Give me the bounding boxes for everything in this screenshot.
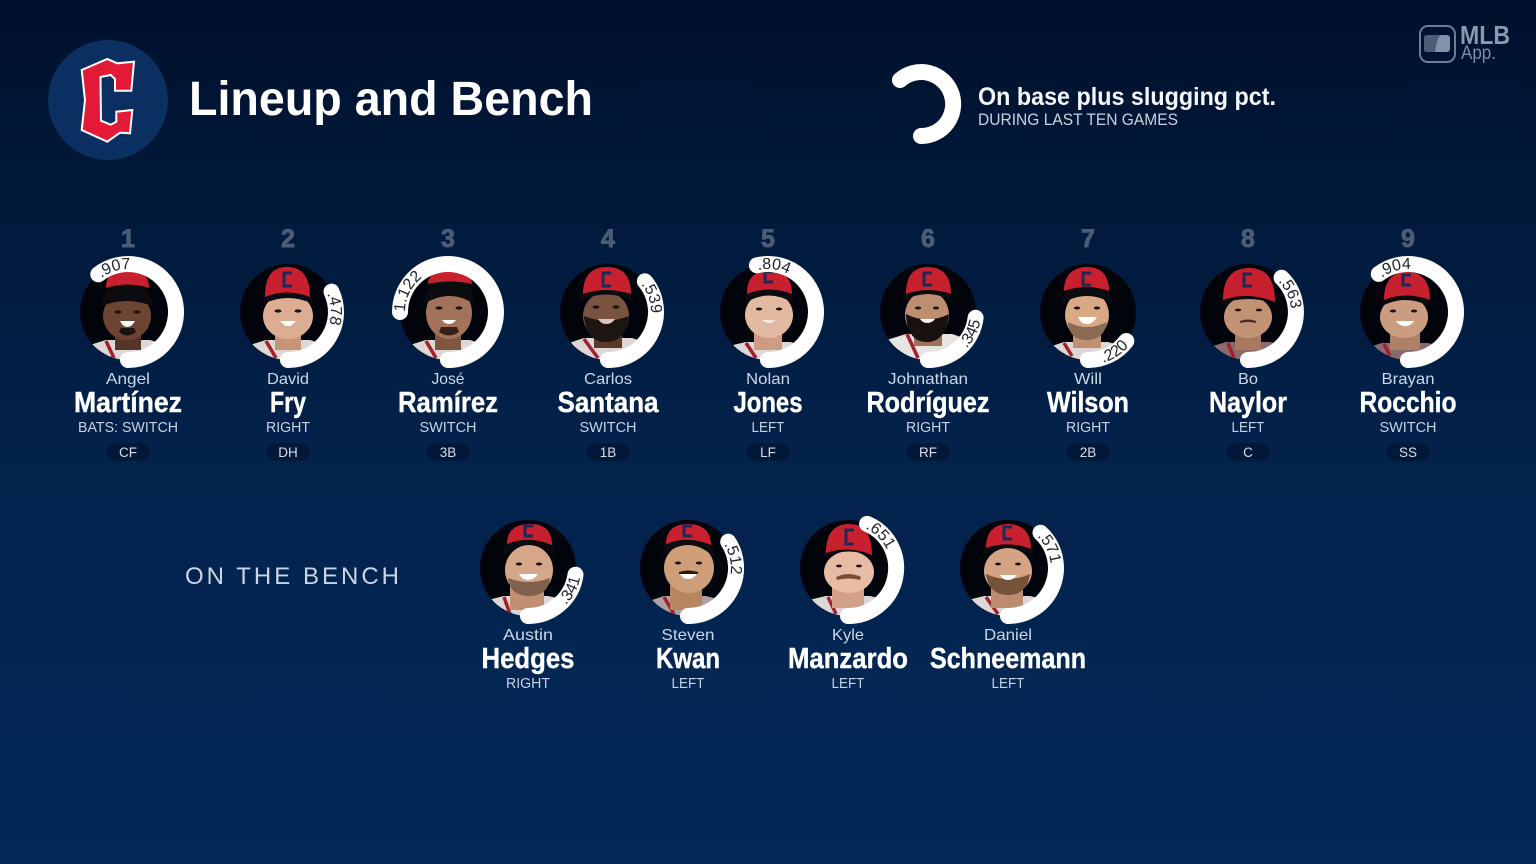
batting order number: 2 [281,225,295,253]
position [1067,443,1109,461]
headshot [800,520,896,616]
position: LF [760,445,776,460]
OPS ring .904 [1370,256,1464,368]
batting order number: 9 [1401,225,1415,253]
position [427,443,469,461]
bats: LEFT [992,675,1024,692]
team logo [48,40,168,160]
OPS ring .651 [840,516,904,624]
name [930,627,1086,675]
MLB App logo: MLB [1460,20,1510,50]
bats: BATS: SWITCH [78,419,178,436]
name: Jones [734,387,802,419]
player: Steven Kwan [640,520,744,692]
name: Kyle [832,627,864,644]
batting order number: 1 [121,225,135,253]
batting order number: 4 [601,225,615,253]
name: Austin [503,627,553,644]
OPS ring .571 [1000,524,1064,624]
name [398,371,498,419]
bats: RIGHT [1066,419,1110,436]
headshot [640,520,736,616]
name: Angel [106,371,150,388]
headshot [1360,272,1448,360]
MLB App logo [1420,20,1510,64]
position [1387,443,1429,461]
batting order number: 6 [921,225,935,253]
name: Santana [558,387,659,419]
title: Lineup and Bench [189,73,593,126]
OPS ring .904: .904 [1382,258,1410,277]
name: Martínez [74,387,182,419]
position: 1B [600,445,616,460]
headshot [480,520,576,616]
OPS ring .345: .345 [962,320,980,348]
OPS ring .651: .651 [866,523,895,549]
player: Brayan Rocchio [1360,225,1464,461]
OPS ring .345 [920,310,984,368]
name: Schneemann [930,643,1086,675]
OPS ring 1.122 [392,256,504,368]
name: Naylor [1209,387,1287,419]
headshot [80,272,168,360]
player: Bo Naylor [1200,225,1304,461]
name: Manzardo [788,643,908,675]
position [107,443,149,461]
bats: LEFT [1232,419,1264,436]
name: Bo [1238,371,1258,388]
OPS ring .907 [90,256,184,368]
position: 2B [1080,445,1096,460]
headshot [400,272,488,360]
OPS ring .478: .478 [328,294,342,325]
headshot [720,268,808,360]
name: Kwan [656,643,720,675]
name: Carlos [584,371,632,388]
OPS ring .341: .341 [562,578,580,604]
name [1047,371,1129,419]
OPS ring .512 [680,534,744,624]
OPS ring .804: .804 [759,258,791,274]
player: Kyle Manzardo [788,516,908,692]
player: José Ramírez [392,225,504,461]
player: Austin Hedges [480,520,584,692]
name: Brayan [1382,371,1434,388]
name [74,371,182,419]
position [587,443,629,461]
name [267,371,309,419]
batting order number: 3 [441,225,455,253]
headshot [560,264,656,360]
position: C [1243,445,1253,460]
bats: SWITCH [1380,419,1436,436]
bats: RIGHT [906,419,950,436]
name [866,371,990,419]
legend text: On base plus slugging pct. [978,83,1276,111]
name [788,627,908,675]
name: José [432,371,465,388]
OPS ring .563 [1240,270,1304,368]
bats: RIGHT [506,675,550,692]
name [1209,371,1287,419]
bats: LEFT [672,675,704,692]
player: Angel Martínez [74,225,184,461]
OPS ring .539: .539 [642,284,662,312]
bats: SWITCH [580,419,636,436]
bats: SWITCH [420,419,476,436]
OPS ring .539 [600,273,664,368]
position [907,443,949,461]
name [558,371,659,419]
name: Nolan [746,371,790,388]
headshot [960,520,1056,616]
headshot [1040,264,1136,360]
legend text: DURING LAST TEN GAMES [978,111,1178,129]
OPS ring .907: .907 [102,258,130,278]
player: Nolan Jones [720,225,824,461]
position: 3B [440,445,456,460]
batting order number: 8 [1241,225,1255,253]
position [267,443,309,461]
headshot [1200,264,1296,360]
name [656,627,720,675]
name: Johnathan [888,371,968,388]
player: Johnathan Rodríguez [866,225,990,461]
position: RF [919,445,937,460]
OPS ring .341 [520,566,584,624]
OPS ring .512: .512 [724,544,742,574]
position: SS [1399,445,1417,460]
name: David [267,371,309,388]
name: Rodríguez [866,387,990,419]
position: DH [278,445,298,460]
bats: RIGHT [266,419,310,436]
name: Rocchio [1360,387,1456,419]
headshot [240,264,336,360]
position [1227,443,1269,461]
player: Daniel Schneemann [930,520,1086,692]
player: Will Wilson [1040,225,1136,461]
name: Ramírez [398,387,498,419]
OPS ring .220 [1080,333,1134,368]
OPS ring .220: .220 [1104,340,1127,362]
bench heading: ON THE BENCH [185,563,399,590]
batting order number: 7 [1081,225,1095,253]
OPS ring .563: .563 [1279,279,1302,308]
OPS ring .478 [280,284,344,368]
position: CF [119,445,137,460]
name: Fry [270,387,306,419]
name: Will [1074,371,1102,388]
legend ring icon [900,72,953,136]
name: Wilson [1047,387,1129,419]
batting order number: 5 [761,225,775,253]
OPS ring .571: .571 [1038,534,1061,563]
name: Daniel [984,627,1032,644]
name: Steven [662,627,714,644]
name [1360,371,1456,419]
name [734,371,802,419]
bats: LEFT [832,675,864,692]
name: Hedges [482,643,574,675]
name [482,627,574,675]
player: Carlos Santana [558,225,664,461]
headshot [880,264,976,360]
OPS ring .804 [748,256,824,368]
legend text [978,83,1276,129]
bats: LEFT [752,419,784,436]
position [747,443,789,461]
OPS ring 1.122: 1.122 [394,270,422,311]
player: David Fry [240,225,344,461]
MLB App logo: App. [1461,43,1496,64]
